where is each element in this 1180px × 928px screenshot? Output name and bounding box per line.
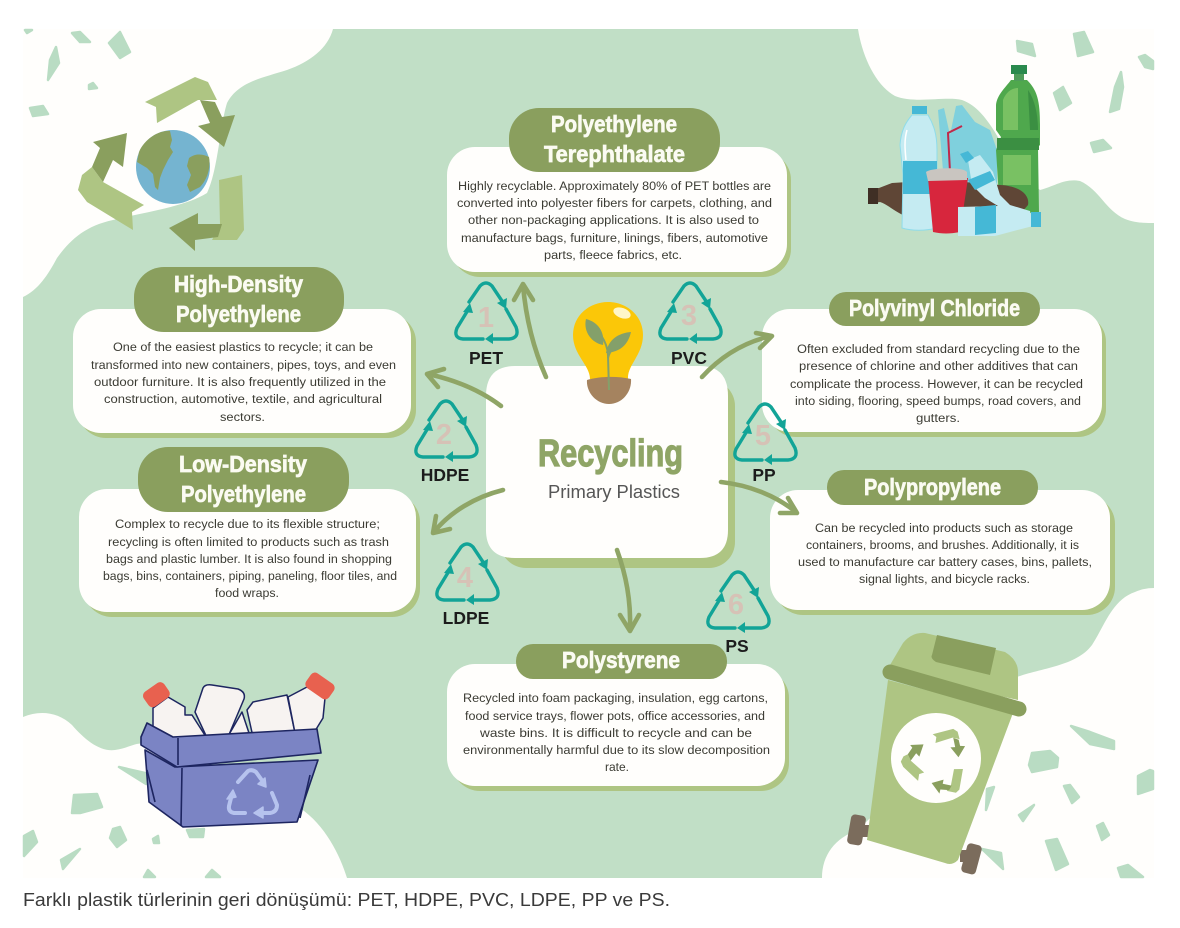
text block: PET [457, 179, 772, 262]
pill heading: PET: Terephthalate [544, 141, 685, 167]
icon: bottles in bin [153, 685, 325, 742]
recycling code 2 HDPE: HDPE [421, 465, 469, 485]
text block: PS: environmentally harmful due to its slow decomposition [463, 743, 770, 757]
text block: PET: parts, fleece fabrics, etc. [544, 248, 682, 262]
text block: LDPE [103, 517, 397, 600]
text block: HDPE: construction, automotive, textile, and agricultural [104, 392, 382, 406]
white badge with recycle icon [891, 713, 981, 803]
text block: HDPE [91, 340, 396, 424]
icon: plastic bottles [868, 65, 1041, 236]
icon: green bottle [996, 65, 1040, 213]
bin rim [141, 723, 321, 767]
icon: globe [136, 130, 210, 204]
recycling code 3 PVC: PVC [671, 348, 707, 368]
text block: PET: manufacture bags, furniture, linings, fibers, automotive [461, 231, 768, 245]
pill heading: HDPE: Polyethylene [176, 301, 301, 327]
white blob: bottom right [822, 588, 1154, 878]
text block: PVC: presence of chlorine and other additives that can [799, 359, 1078, 373]
arrow: to PP [721, 482, 797, 513]
panel: HDPE [73, 267, 416, 438]
text block: PP: containers, brooms, and brushes. Additionally, it is [806, 538, 1079, 552]
recycling code 2 HDPE: 2 [436, 419, 452, 451]
pill heading: PET: Polyethylene [551, 111, 677, 137]
recycling code 1 PET [456, 283, 517, 368]
panel: LDPE [79, 447, 420, 617]
pill heading: PET [509, 108, 720, 172]
text block: PET: other non-packaging applications. It is also used to [468, 213, 759, 227]
text block: PP [798, 521, 1092, 586]
icon: red cup [926, 168, 968, 234]
icon: red straw [948, 126, 962, 172]
pill heading: LDPE: Low-Density [179, 451, 307, 477]
pill heading: PS [516, 644, 727, 679]
pill heading: HDPE: High-Density [174, 271, 303, 297]
text block: PVC: gutters. [916, 411, 960, 425]
text block: LDPE: bags, bins, containers, piping, paneling, floor tiles, and [103, 569, 397, 583]
icon: plastic bag [938, 105, 997, 195]
text block: PS: waste bins. It is difficult to recycle and can be [479, 726, 752, 740]
recycling code 1 PET: 1 [478, 302, 494, 334]
bin body and lid [867, 680, 1013, 864]
subheading: primary plastics: Primary Plastics [548, 482, 680, 502]
text block: PP: used to manufacture car battery cases, bins, pallets, [798, 555, 1092, 569]
white blob: bottom left [23, 713, 347, 878]
text block: PVC: into siding, flooring, speed bumps, road covers, and [795, 394, 1081, 408]
recycling code 5 PP: PP [752, 465, 776, 485]
arrow: to PVC [702, 333, 772, 377]
recycling code 4 LDPE [437, 544, 498, 628]
arrow: to HDPE [427, 369, 501, 406]
text block: LDPE: recycling is often limited to products such as trash [108, 535, 389, 549]
pill heading: PP: Polypropylene [864, 474, 1001, 500]
panel: PVC [762, 292, 1106, 437]
recycling code 4 LDPE: LDPE [443, 608, 489, 628]
pill heading: PP [827, 470, 1038, 505]
white blob: top left [23, 29, 333, 297]
recycling code 6 PS: 6 [728, 589, 744, 621]
text block: PVC [790, 342, 1083, 425]
recycling code 1 PET: PET [469, 348, 503, 368]
recycling code 3 PVC [660, 283, 721, 368]
panel: PS [447, 644, 789, 791]
white blob: top right [858, 29, 1154, 223]
arrow: to LDPE [433, 490, 503, 533]
icon: water bottle [900, 106, 937, 230]
text block: LDPE: food wraps. [215, 586, 279, 600]
panel: PP [770, 470, 1115, 615]
icon: green wheelie bin [847, 633, 1019, 875]
pill heading: HDPE [134, 267, 344, 332]
icon: blue recycling bin with bottles [141, 671, 337, 827]
panel: center recycling [486, 366, 735, 568]
recycling code 6 PS: PS [725, 636, 749, 656]
panel: PET [447, 108, 791, 277]
text block: PVC: complicate the process. However, it can be recycled [790, 377, 1083, 391]
pill heading: PS: Polystyrene [562, 647, 680, 673]
pill heading: PVC: Polyvinyl Chloride [849, 295, 1020, 321]
pill heading: LDPE: Polyethylene [181, 481, 306, 507]
recycling code 2 HDPE [416, 401, 477, 485]
text block: HDPE: transformed into new containers, pipes, toys, and even [91, 358, 396, 372]
text block: PVC: Often excluded from standard recycling due to the [797, 342, 1080, 356]
text block: HDPE: outdoor furniture. It is also frequently utilized in the [94, 375, 386, 389]
text block: PP: signal lights, and bicycle racks. [859, 572, 1030, 586]
text block: LDPE: bags and plastic lumber. It is also found in shopping [106, 552, 392, 566]
pill heading: PVC [829, 292, 1040, 326]
recycling code 4 LDPE: 4 [457, 562, 473, 594]
text block: LDPE: Complex to recycle due to its flexible structure; [115, 517, 380, 531]
pill heading: LDPE [138, 447, 349, 512]
icon: red bottle caps [141, 680, 172, 709]
bin body [145, 750, 318, 827]
arrow: to PS [617, 550, 639, 631]
text block: PET: converted into polyester fibers for carpets, clothing, and [457, 196, 772, 210]
text block: PET: Highly recyclable. Approximately 80% of PET bottles are [458, 179, 771, 193]
text block: PP: Can be recycled into products such as storage [815, 521, 1073, 535]
text block: PS: Recycled into foam packaging, insulation, egg cartons, [463, 691, 768, 705]
icon: light bulb with plant [573, 302, 643, 404]
icon: crushed bottle [958, 151, 1041, 236]
text block: HDPE: sectors. [220, 410, 265, 424]
recycling code 5 PP [735, 404, 796, 485]
heading: recycling: Recycling [538, 433, 683, 475]
icon: recycle symbol on bin [227, 770, 277, 818]
text block: PS: food service trays, flower pots, office accessories, and [465, 709, 765, 723]
text block: PS [463, 691, 770, 774]
wheels [847, 814, 866, 846]
caption: Farklı plastik türlerinin geri dönüşümü: PET, HDPE, PVC, LDPE, PP ve PS. [23, 890, 670, 910]
arrow: to PET [514, 284, 546, 377]
icon: recycling arrows around globe [78, 77, 244, 251]
text block: HDPE: One of the easiest plastics to recycle; it can be [113, 340, 373, 354]
text block: PS: rate. [605, 760, 629, 774]
icon: brown bottle [868, 180, 1028, 220]
recycling code 6 PS [708, 572, 769, 656]
recycling code 5 PP: 5 [755, 420, 771, 452]
recycling code 3 PVC: 3 [681, 300, 697, 332]
